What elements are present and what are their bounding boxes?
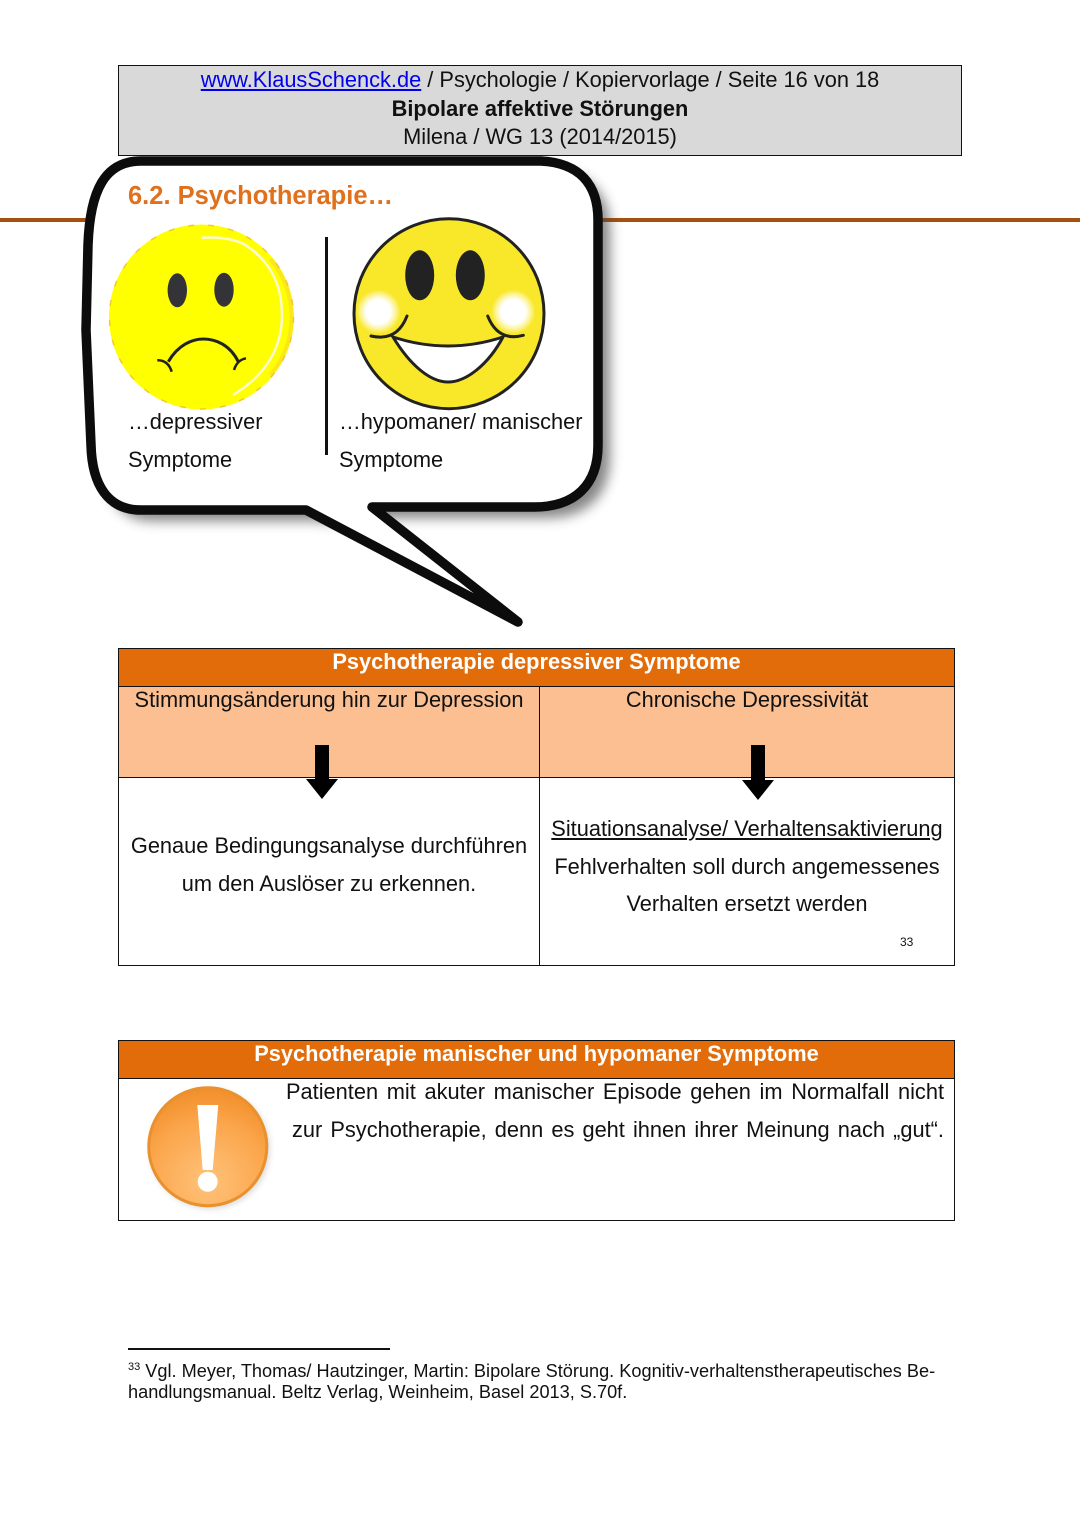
orange rule (0, 218, 1080, 222)
white cell left: um den Auslöser zu erkennen. (182, 871, 476, 896)
arrow left (306, 745, 338, 799)
warning text line 2: zur Psychotherapie, denn es geht ihnen ihrer Meinung nach „gut“. (292, 1117, 944, 1142)
source number: 33 (900, 935, 913, 949)
divider (325, 237, 328, 455)
bubble caption left: Symptome (128, 447, 232, 472)
table header (119, 649, 954, 687)
table: depressive symptoms (118, 648, 955, 966)
icon: warning (147, 1086, 272, 1211)
header line 3: Milena / WG 13 (2014/2015) (403, 124, 677, 149)
white cell right: Situationsanalyse/ Verhaltensaktivierung (551, 816, 943, 841)
speech bubble (81, 156, 618, 627)
white cell left (119, 778, 540, 965)
icon: sad face (108, 224, 294, 410)
peach cell left (119, 687, 540, 778)
footnote rule (128, 1348, 390, 1350)
bubble caption left: …depressiver (128, 409, 262, 434)
white cell right (551, 816, 943, 916)
header line 2: Bipolare affektive Störungen (392, 96, 688, 121)
bubble caption right (339, 409, 583, 472)
white cell left: Genaue Bedingungsanalyse durchführen (131, 833, 527, 858)
footnote: handlungsmanual. Beltz Verlag, Weinheim, Basel 2013, S.70f. (128, 1382, 627, 1402)
table header (119, 1041, 954, 1079)
icon: happy face (352, 217, 546, 410)
arrow right (742, 745, 774, 800)
warning text line 1: Patienten mit akuter manischer Episode gehen im Normalfall nicht (286, 1079, 944, 1104)
table: manic symptoms (118, 1040, 955, 1221)
peach cell left: Stimmungsänderung hin zur Depression (135, 687, 523, 712)
white cell right: Verhalten ersetzt werden (626, 891, 868, 916)
header box (118, 65, 962, 156)
section heading: 6.2. Psychotherapie… (128, 182, 393, 210)
peach cell right: Chronische Depressivität (626, 687, 868, 712)
bubble caption right: …hypomaner/ manischer (339, 409, 583, 434)
header line 1: www.KlausSchenck.de / Psychologie / Kopiervorlage / Seite 16 von 18 (201, 67, 879, 92)
footnote (128, 1361, 935, 1402)
white cell right: Fehlverhalten soll durch angemessenes (554, 854, 940, 878)
table header: Psychotherapie depressiver Symptome (332, 649, 741, 674)
peach cell right (540, 687, 954, 778)
bubble caption right: Symptome (339, 447, 443, 472)
table header: Psychotherapie manischer und hypomaner Symptome (254, 1041, 819, 1066)
bubble caption left (128, 409, 262, 472)
footnote: 33 Vgl. Meyer, Thomas/ Hautzinger, Martin: Bipolare Störung. Kognitiv-verhaltenstherapeutisches Be- (128, 1361, 935, 1381)
